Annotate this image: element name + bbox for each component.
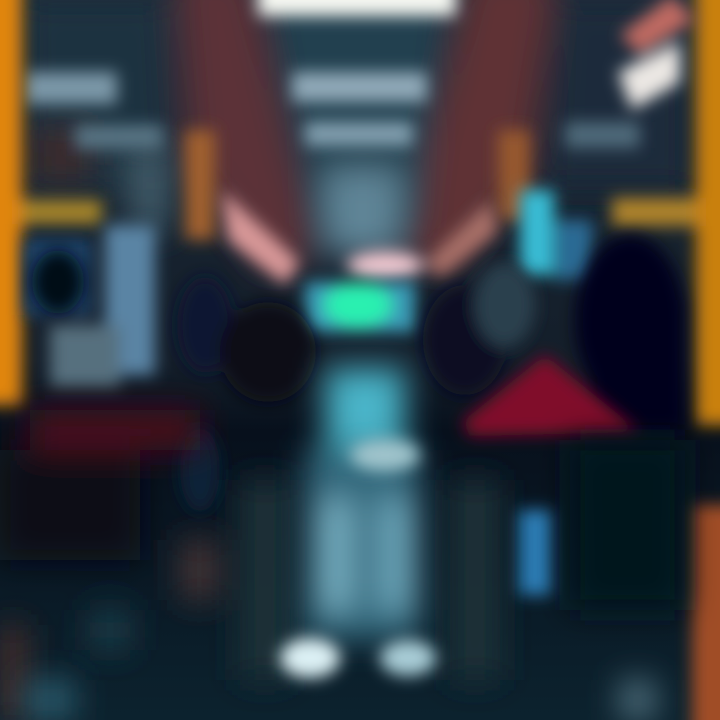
dark red lower band (462, 355, 640, 436)
reflective floor (25, 368, 655, 720)
lower shadows (0, 410, 685, 720)
ceiling light rows (25, 0, 640, 149)
teal centre glow (305, 282, 415, 332)
flag at top right (618, 0, 695, 110)
dark silhouettes of people (32, 235, 685, 512)
pink walls converging on centre (222, 190, 498, 285)
floor light spots (280, 439, 436, 678)
upper walls and ceiling (25, 0, 690, 270)
blue panels (25, 190, 592, 595)
